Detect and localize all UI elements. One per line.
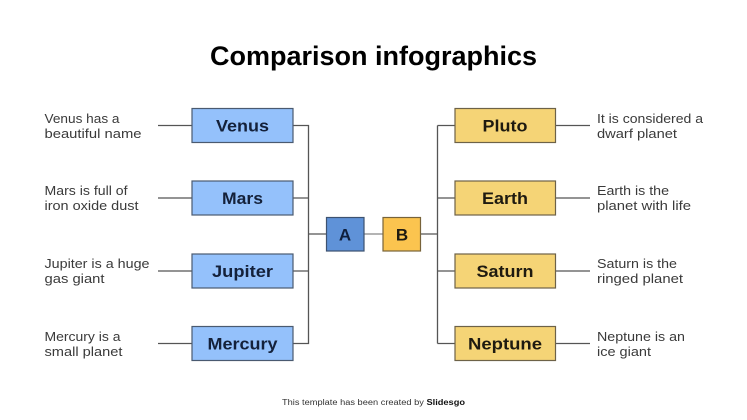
box: Mars: Mars bbox=[222, 189, 263, 208]
description: Neptune bbox=[597, 329, 685, 359]
description: Saturn: Saturn is the bbox=[597, 256, 677, 271]
box: B: B bbox=[396, 226, 408, 244]
description: Jupiter bbox=[44, 256, 150, 286]
footer credit: This template has been created by Slidesgo bbox=[282, 398, 465, 407]
description: Neptune: ice giant bbox=[597, 344, 651, 359]
box: Neptune bbox=[455, 326, 556, 360]
box: A bbox=[326, 218, 364, 251]
box: Jupiter: Jupiter bbox=[212, 262, 273, 281]
box: B bbox=[383, 218, 420, 251]
description: Mars: iron oxide dust bbox=[44, 198, 139, 213]
box: Mercury: Mercury bbox=[208, 334, 278, 354]
description: Pluto bbox=[597, 111, 704, 141]
box: Jupiter bbox=[192, 254, 293, 288]
description: Mercury: Mercury is a bbox=[44, 329, 121, 344]
connector lines: left bracket bbox=[158, 126, 326, 344]
description: Jupiter: Jupiter is a huge bbox=[44, 256, 150, 271]
description: Neptune: Neptune is an bbox=[597, 329, 685, 344]
description: Earth: planet with life bbox=[597, 198, 691, 213]
box: Venus bbox=[192, 108, 293, 142]
box: Mars bbox=[192, 181, 293, 215]
box: Pluto bbox=[455, 108, 556, 142]
description: Venus bbox=[44, 111, 142, 141]
description: Pluto: It is considered a bbox=[597, 111, 704, 126]
connector line: A to B bbox=[364, 233, 383, 235]
description: Earth bbox=[597, 183, 691, 213]
description: Venus: beautiful name bbox=[44, 126, 142, 141]
description: Mars bbox=[44, 183, 139, 213]
description: Venus: Venus has a bbox=[44, 111, 120, 126]
box: Neptune: Neptune bbox=[468, 334, 542, 354]
description: Saturn: ringed planet bbox=[597, 271, 683, 286]
box: Venus: Venus bbox=[216, 116, 269, 136]
title: Comparison infographics bbox=[210, 41, 537, 71]
box: Earth: Earth bbox=[482, 189, 528, 208]
box: Mercury bbox=[192, 326, 293, 360]
description: Mercury: small planet bbox=[44, 344, 123, 359]
description: Mercury bbox=[44, 329, 123, 359]
box: Saturn bbox=[455, 254, 556, 288]
description: Pluto: dwarf planet bbox=[597, 126, 677, 141]
connector lines: right bracket bbox=[420, 126, 590, 344]
box: Saturn: Saturn bbox=[476, 262, 534, 281]
box: A: A bbox=[339, 226, 351, 244]
description: Saturn bbox=[597, 256, 683, 286]
description: Earth: Earth is the bbox=[597, 183, 669, 198]
box: Earth bbox=[455, 181, 556, 215]
description: Mars: Mars is full of bbox=[44, 183, 128, 198]
description: Jupiter: gas giant bbox=[44, 271, 105, 286]
box: Pluto: Pluto bbox=[482, 116, 528, 136]
